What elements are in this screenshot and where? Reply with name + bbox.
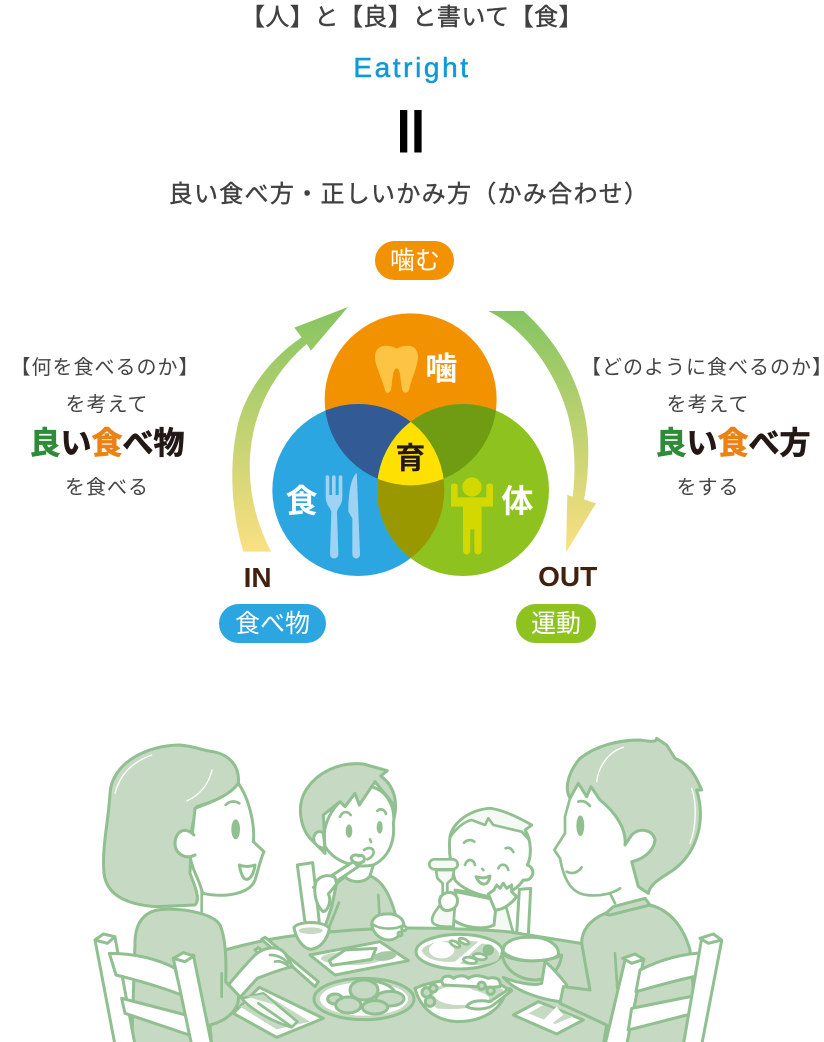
mother's hair [104,745,239,907]
father's tray highlight [543,1007,563,1025]
pill: exercise [516,604,596,643]
text block: left, good food: を考えて [66,393,148,416]
mother's sleeve crease [218,973,226,997]
garnish balls [422,982,494,1006]
venn: green circle [377,404,549,576]
heading: title line: 【人】と【良】と書いて【食】 [241,4,583,31]
icon: vertical equals sign [400,110,422,152]
mother [95,745,264,1042]
boy's side dish [373,950,397,962]
chair cap, left [95,934,115,943]
lettuce [442,976,500,987]
croquettes [328,980,404,1014]
plate compartment left [422,940,478,962]
fruit slices [449,937,487,964]
chair slat, top [109,953,182,995]
father [554,738,722,1042]
mother's fish [242,993,297,1027]
compartment plate [416,934,503,969]
baby's arm [432,903,455,927]
mother's upper highlight [115,755,152,793]
mother's hair highlights [187,770,212,801]
chair slat, lower [122,998,189,1035]
father's collar [605,898,650,915]
text block: left, good food [10,356,200,499]
label: eat kanji: 食 [286,483,318,519]
boy's neck [345,865,373,882]
croquette plate [314,978,414,1020]
venn: overlap blue-green [377,422,444,558]
icon: person [451,477,493,554]
label: body kanji: 体 [501,483,533,519]
mother's mouth [239,865,255,879]
boy's fish [329,948,376,965]
father's tray food [528,1005,573,1024]
father's body [560,905,698,1042]
venn: blue circle [272,404,444,576]
mother's eye [231,819,240,839]
pill: exercise: 運動 [531,610,581,638]
mother's ear [175,830,195,857]
venn: overlap orange-green [378,404,496,479]
venn: overlap orange-blue [326,404,411,479]
plate inner ring [320,982,408,1016]
pill: food: 食べ物 [235,610,310,638]
text block: left, good food: 良い食べ物 [30,426,184,461]
father's hand [503,962,567,1002]
pill: food [219,604,326,643]
venn: centre [378,422,444,486]
icon: knife [348,473,360,558]
chair post, left [605,960,643,1042]
mother's face [190,783,264,895]
chair post, right [683,938,722,1042]
chair slat, top [636,953,707,992]
heaped rice [503,937,558,961]
boy's ear [314,832,325,848]
rice ball [429,942,454,958]
boy's shirt [323,876,398,932]
dish interior [420,984,503,1009]
icon: tooth [375,346,418,393]
chair cap, left [623,954,644,963]
mother's neck [198,890,206,912]
heading: Eatright: Eatright [353,52,471,83]
father's highlight, front [597,747,623,782]
miso bowl [294,922,329,949]
food on the right half of the table [415,934,583,1034]
boy's chair post [297,863,320,930]
mother's brow [226,802,239,805]
label: IN: IN [244,562,272,593]
baby's chair post [517,888,531,935]
boy's face [323,787,394,866]
mother's chopsticks [255,937,318,987]
father's face [554,798,620,895]
boy and baby seated behind the table [297,764,533,935]
chair post, right [173,955,212,1042]
shadow under mother's fish [240,995,310,1029]
pill: chew: 噛む [390,247,440,275]
mother's body [132,909,239,1042]
baby's head [449,808,533,897]
arrow: IN to chew [232,307,348,552]
label: OUT: OUT [538,561,597,592]
text block: left, good food: を食べる [65,476,149,499]
text block: right, good way of eating: を考えて [666,393,750,416]
boy's hair [300,764,396,853]
venn: orange circle [325,313,497,485]
boy's tray [310,942,408,975]
boy's food [351,855,364,863]
rice dish [415,979,507,1022]
table [190,928,640,1042]
arrow: chew to OUT [488,311,596,552]
spoon [467,988,512,1009]
illustration: family eating at table [95,738,722,1042]
boy's shirt creases [329,895,379,927]
fried rice [433,986,489,1005]
chair cap, right [173,953,194,962]
father's rice bowl [502,953,562,980]
baby's hand [488,883,517,910]
text block: left, good food: 【何を食べるのか】 [10,356,200,379]
father's hair [567,738,702,893]
baby's hair [450,808,532,840]
food on the left half of the table [228,914,414,1037]
rice on plate [353,981,395,995]
boy's eyes [346,821,383,838]
baby's fist [440,892,458,911]
plate compartment right [460,943,499,965]
text block: right, good way of eating: をする [676,477,740,499]
vegetables [483,944,494,956]
mother's tray [233,987,323,1037]
label: chew kanji: 噛 [425,350,457,386]
icon: fork [326,475,342,558]
chair cap, right [700,934,722,943]
chair post, left [95,937,135,1042]
father's highlight, back [690,788,695,843]
father's tray [513,1002,583,1034]
pill: chew [375,241,454,280]
mother's finger lines [270,955,289,967]
chart: chew / eat / body cycle [232,307,597,593]
mother's hand [228,948,293,997]
boy's brows, nose, mouth [340,809,386,859]
father's brow and mouth [567,801,615,903]
baby's fork [436,870,454,893]
boy's chopsticks [313,862,358,890]
text block: right, good way of eating [581,356,824,499]
text block: right, good way of eating: 良い食べ方 [656,426,810,461]
baby's mouth [476,876,490,884]
baby's face details [464,840,513,870]
father's eye [576,815,584,836]
father's sleeve crease [615,953,617,988]
boy's hand [315,876,337,912]
baby's body and bib [453,890,513,933]
chair slat, lower [628,995,698,1030]
boy's rice bowl [372,914,406,940]
heading: subtitle: 良い食べ方・正しいかみ方（かみ合わせ） [169,181,649,208]
baby's food on fork [429,859,458,869]
shadow under boy's fish [321,952,382,965]
label: grow kanji: 育 [395,443,425,476]
